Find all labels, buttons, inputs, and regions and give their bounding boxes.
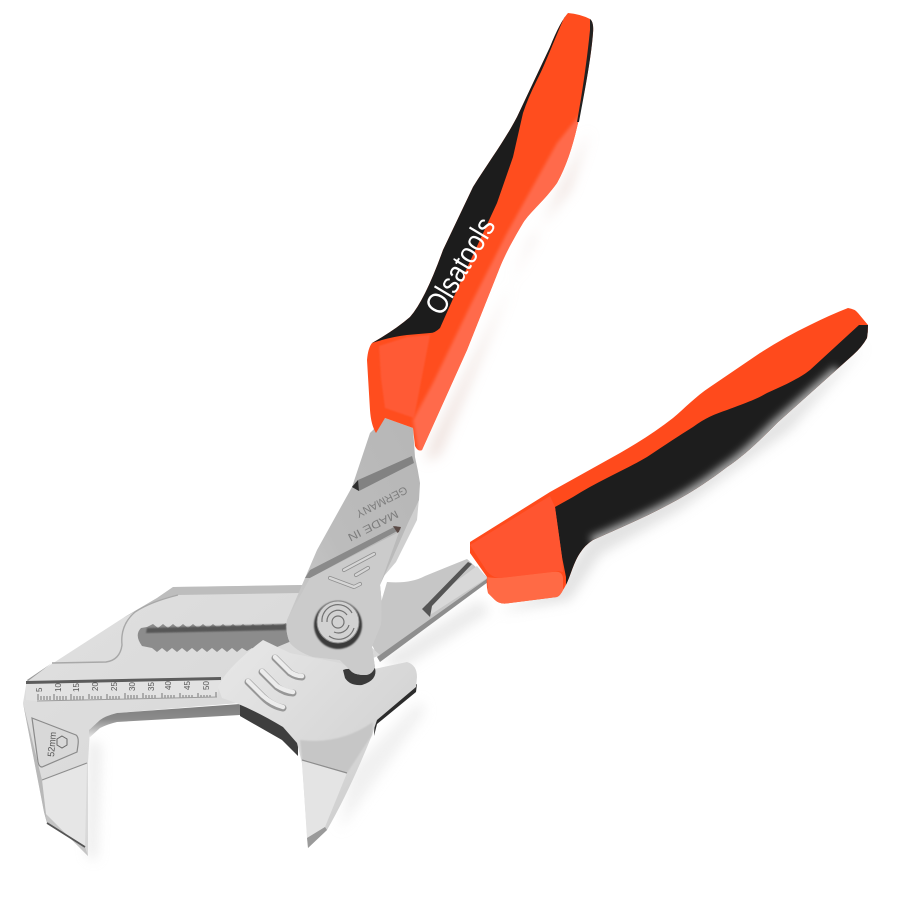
scale numbers: 30 (128, 682, 137, 691)
boot highlight (379, 335, 430, 418)
left jaw face (42, 763, 87, 847)
top bevel (123, 585, 302, 618)
scale numbers: 40 (164, 681, 173, 690)
black insert (372, 13, 568, 343)
scale numbers: 5 (35, 687, 44, 692)
soft ground shadows (88, 130, 865, 860)
upper handle arm with pivot plate (286, 418, 420, 675)
boot highlight (470, 496, 563, 578)
stamped text: MADE IN (346, 507, 400, 543)
lower handle grip (470, 308, 880, 604)
black insert (555, 325, 880, 590)
lower handle arm (370, 559, 488, 662)
jaw body (23, 585, 380, 856)
lower plate highlight (286, 532, 399, 675)
right jaw face (302, 760, 347, 838)
grey reflection (593, 372, 840, 544)
main jaw with measuring scale (23, 585, 380, 856)
underside shadow (89, 704, 240, 738)
facet line (52, 595, 178, 663)
dark slit (374, 684, 417, 736)
scale numbers: 50 (202, 681, 211, 690)
scale band (26, 678, 221, 701)
slot (138, 623, 294, 652)
neck shading (300, 722, 373, 773)
scale numbers: 15 (72, 683, 81, 692)
hex size badge (32, 718, 78, 767)
upper handle grip (367, 13, 600, 460)
pivot pin (314, 601, 362, 649)
side slit (380, 498, 419, 572)
stamped text (346, 483, 409, 543)
scale numbers: 25 (110, 682, 119, 691)
moving jaw (218, 640, 417, 848)
scale ticks (38, 692, 216, 700)
scale numbers: 20 (91, 682, 100, 691)
groove lower (305, 526, 401, 578)
embossed marks (330, 554, 374, 587)
groove upper (352, 456, 414, 491)
brand logo: Olsatools (419, 212, 502, 321)
pivot hole (343, 668, 375, 685)
scale numbers (35, 681, 211, 692)
light side facet (412, 116, 578, 450)
ribs (248, 657, 302, 708)
orange shell (367, 13, 593, 450)
scale numbers: 35 (147, 682, 156, 691)
orange shell (470, 308, 868, 604)
stamped text: GERMANY (353, 483, 409, 520)
scale numbers: 10 (54, 683, 63, 692)
right edge black sliver (577, 19, 593, 122)
scale numbers: 45 (183, 681, 192, 690)
hex size badge: 52mm (46, 731, 59, 757)
